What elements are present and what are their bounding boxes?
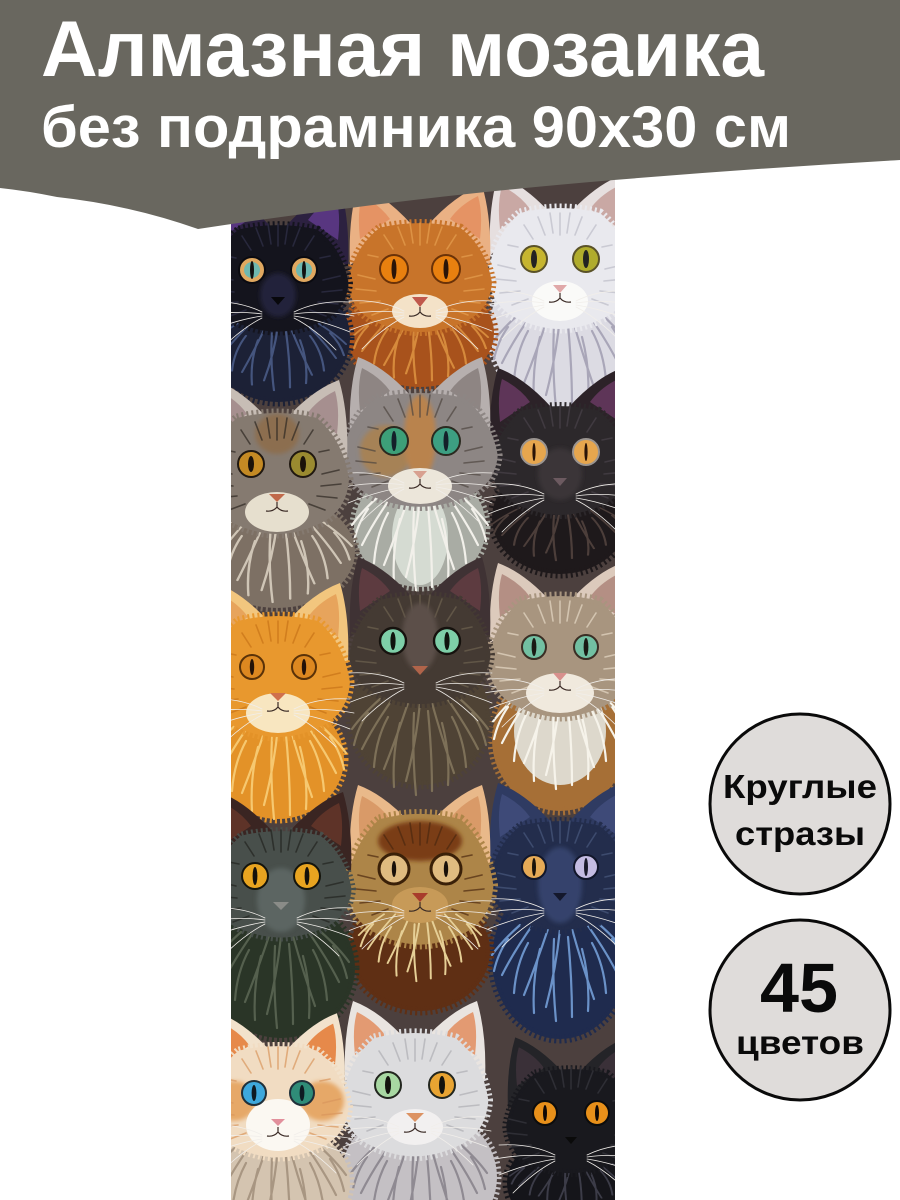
- cat: ginger third row left: [231, 583, 354, 824]
- cat: beige third row right: [485, 563, 615, 816]
- cat: grey-green fourth row left: [231, 792, 360, 1042]
- badge: round rhinestones: [710, 714, 890, 894]
- header banner: [0, 0, 900, 229]
- cat: dark brown third row middle: [344, 557, 496, 795]
- cat: black top left: [231, 208, 354, 406]
- panel: cat mosaic picture: [231, 180, 615, 1200]
- cat: black bottom right: [494, 1038, 615, 1200]
- badge: round rhinestones: стразы: [735, 815, 865, 852]
- cat: grey tabby second row left: [231, 380, 360, 612]
- badge: 45 colours: цветов: [736, 1024, 864, 1061]
- badge: 45 colours: [710, 920, 890, 1100]
- title: Алмазная мозаика: [41, 4, 765, 93]
- cat: white top right: [484, 180, 615, 406]
- badge: round rhinestones: Круглые: [723, 768, 877, 805]
- subtitle: без подрамника 90х30 см: [41, 95, 791, 160]
- cat: brown tabby fourth row middle: [344, 785, 496, 1011]
- cat: dark blue fourth row right: [486, 783, 615, 1044]
- cat: white bottom middle: [339, 1001, 497, 1200]
- cat: tabby second row middle: [342, 357, 498, 591]
- cat: black second row right: [484, 368, 615, 578]
- cat: cream bottom left: [231, 1013, 354, 1200]
- badge: 45 colours: 45: [760, 949, 838, 1027]
- cat: orange top middle: [344, 185, 496, 387]
